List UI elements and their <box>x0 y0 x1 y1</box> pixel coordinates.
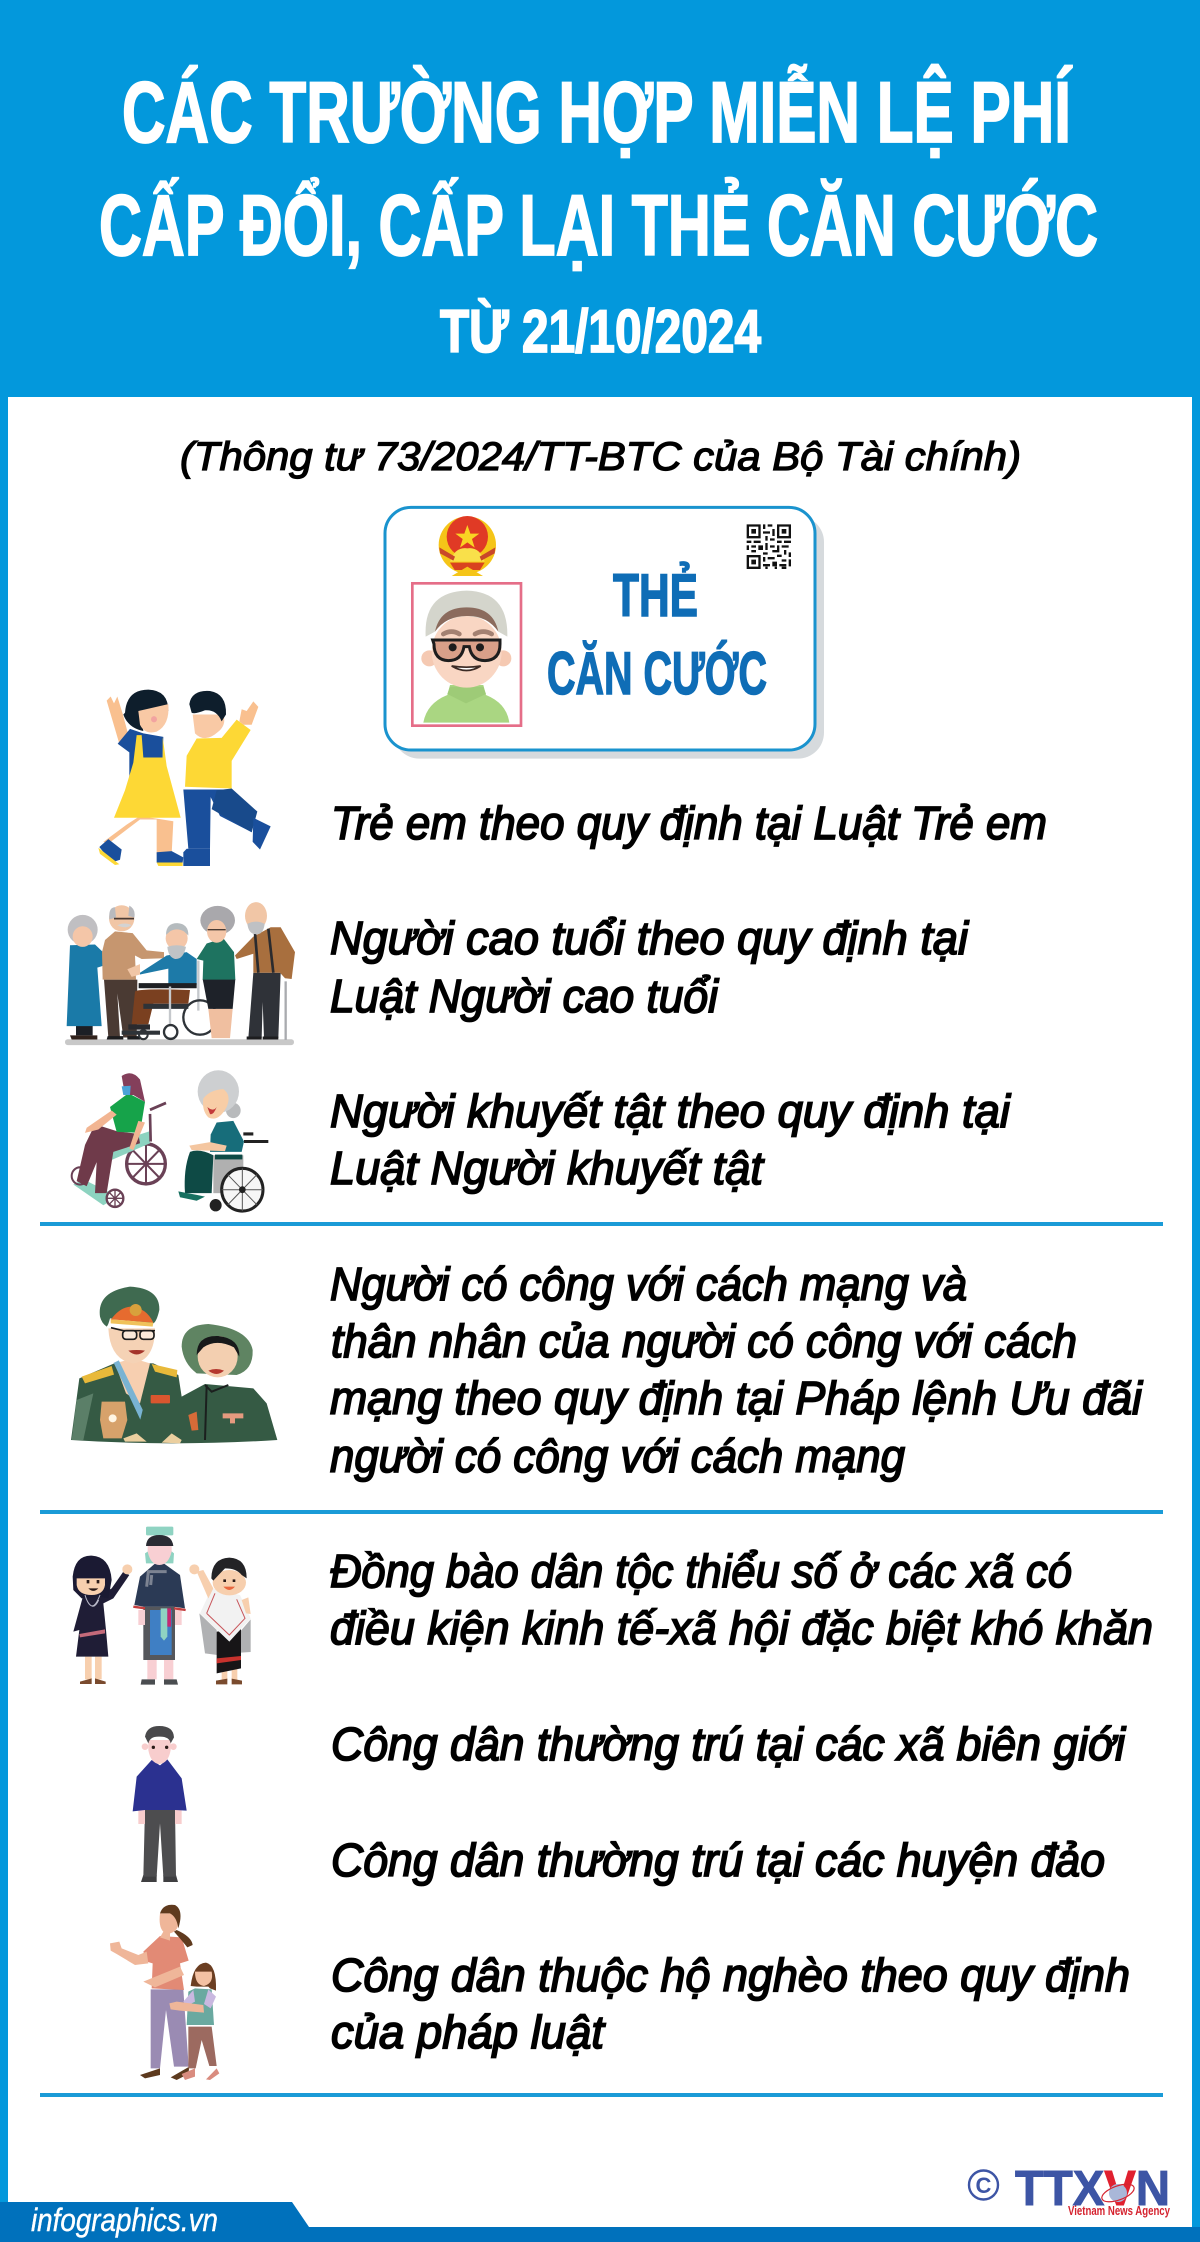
item: disabled people: Luật Người khuyết tật <box>330 1142 765 1194</box>
left girl <box>85 1657 102 1679</box>
item: poor households: của pháp luật <box>331 2006 606 2058</box>
middle man <box>147 1660 173 1679</box>
divider <box>40 1222 1163 1226</box>
icon: mother and child <box>110 1905 219 2080</box>
item: revolutionary contributors: thân nhân của người có công với cách <box>331 1315 1077 1367</box>
icon: citizen man <box>133 1726 187 1882</box>
footer band <box>0 2202 1200 2242</box>
title <box>99 65 1098 274</box>
old woman <box>185 1151 213 1193</box>
icon: veterans <box>71 1287 277 1443</box>
card shadow <box>393 516 824 759</box>
item: children: Trẻ em theo quy định tại Luật Trẻ em <box>331 797 1047 849</box>
item: disabled people: Người khuyết tật theo quy định tại <box>330 1085 1012 1137</box>
icon: QR code <box>747 524 791 569</box>
item: ethnic minorities: điều kiện kinh tế-xã hội đặc biệt khó khăn <box>330 1602 1153 1654</box>
grandpa brown <box>248 973 281 1038</box>
divider <box>40 2093 1163 2097</box>
eligibility list <box>330 797 1153 2058</box>
icon: ethnic minority people <box>73 1527 251 1685</box>
item: disabled people <box>330 1085 1012 1194</box>
item: revolutionary contributors <box>330 1258 1144 1482</box>
copyright mark <box>969 2170 998 2200</box>
wheelchair man <box>132 989 190 1024</box>
icon: people in wheelchairs <box>72 1070 268 1211</box>
item: border communes: Công dân thường trú tại các xã biên giới <box>331 1718 1127 1770</box>
right child <box>222 1668 237 1681</box>
globe <box>1100 2181 1136 2205</box>
grandma left <box>76 1025 93 1035</box>
card title: CĂN CƯỚC <box>547 640 767 707</box>
child <box>182 2068 219 2080</box>
icon: elderly people group <box>65 902 295 1045</box>
icon: national emblem <box>439 516 496 576</box>
item: elderly <box>330 912 970 1022</box>
legal source: (Thông tư 73/2024/TT-BTC của Bộ Tài chính) <box>180 435 1021 479</box>
item: elderly: Người cao tuổi theo quy định tại <box>330 912 970 964</box>
footer site name: infographics.vn <box>31 2202 218 2238</box>
icon: two children <box>98 690 271 866</box>
item: poor households <box>331 1949 1130 2058</box>
card body <box>385 507 815 750</box>
item: revolutionary contributors: Người có công với cách mạng và <box>330 1258 967 1310</box>
card title: THẺ <box>613 562 698 629</box>
item: ethnic minorities: Đồng bào dân tộc thiểu số ở các xã có <box>330 1545 1072 1597</box>
item: revolutionary contributors: mạng theo quy định tại Pháp lệnh Ưu đãi <box>330 1372 1144 1424</box>
card title <box>547 562 767 707</box>
item: poor households: Công dân thuộc hộ nghèo theo quy định <box>331 1949 1130 2001</box>
agency letters: TTXVN <box>1015 2162 1170 2216</box>
grandpa tan sweater <box>104 980 137 1037</box>
woman with mask <box>73 1179 118 1205</box>
grandma green <box>208 1009 233 1038</box>
TTXVN logo <box>969 2162 1171 2218</box>
divider <box>40 1510 1163 1514</box>
mother <box>140 2067 189 2080</box>
ID card <box>385 507 824 759</box>
item: ethnic minorities <box>330 1545 1153 1654</box>
item: elderly: Luật Người cao tuổi <box>330 970 720 1022</box>
photo frame with portrait <box>412 583 521 726</box>
item: island districts: Công dân thường trú tại các huyện đảo <box>331 1834 1105 1886</box>
item: revolutionary contributors: người có công với cách mạng <box>330 1430 905 1482</box>
copyright mark: C <box>976 2173 992 2198</box>
date subtitle: TỪ 21/10/2024 <box>440 298 762 365</box>
